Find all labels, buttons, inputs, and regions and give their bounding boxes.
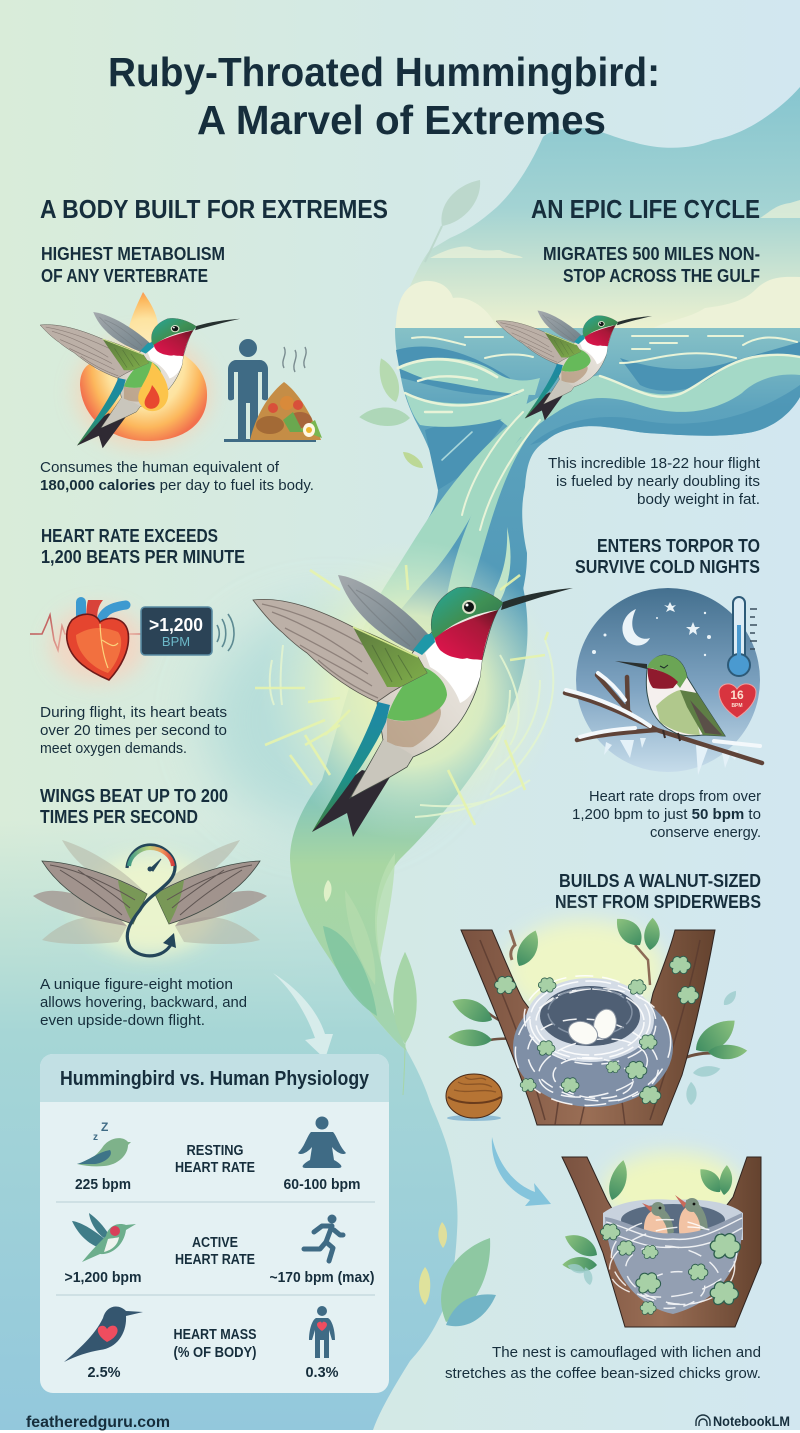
nest heading: NEST FROM SPIDERWEBS <box>555 892 761 912</box>
icon: person with heart <box>309 1306 335 1358</box>
heart rate text: over 20 times per second to <box>40 722 227 739</box>
migration heading <box>543 244 760 286</box>
row: active heart rate: >1,200 bpm <box>64 1270 142 1286</box>
stream strands <box>350 410 540 680</box>
torpor text <box>572 788 761 841</box>
panel header <box>40 1054 389 1102</box>
panel: migration <box>496 244 761 508</box>
heart rate heart <box>719 684 756 718</box>
heart rate heart: BPM <box>731 703 743 709</box>
heart rate heading <box>41 526 245 567</box>
panel: hummingbird vs human physiology <box>40 1054 389 1393</box>
icon: food pile <box>250 347 322 440</box>
migration text: This incredible 18-22 hour flight <box>548 455 761 472</box>
metabolism text: Consumes the human equivalent of <box>40 459 280 476</box>
row: active heart rate: ACTIVE <box>192 1235 238 1251</box>
footer: notebooklm logo: NotebookLM <box>713 1414 790 1429</box>
panel: torpor <box>565 536 762 841</box>
heart rate text: meet oxygen demands. <box>40 740 187 757</box>
row: heart mass <box>64 1306 339 1381</box>
icon: meditating person <box>298 1116 346 1168</box>
migration text <box>548 455 761 508</box>
icon: nest with eggs <box>447 912 747 1125</box>
darker sea bands <box>396 342 800 490</box>
icon: figure-eight wings <box>33 840 267 956</box>
moon and stars <box>592 602 711 656</box>
branch with snow and ice <box>565 673 762 775</box>
wings heading <box>40 786 228 827</box>
metabolism heading: OF ANY VERTEBRATE <box>41 266 208 286</box>
migration heading: STOP ACROSS THE GULF <box>563 266 760 286</box>
metabolism text: 180,000 calories per day to fuel its body. <box>40 477 314 494</box>
row: active heart rate: HEART RATE <box>175 1252 255 1268</box>
icon: hummingbird over gulf <box>496 310 652 421</box>
row: active heart rate: ~170 bpm (max) <box>270 1270 375 1286</box>
scene: gulf sky and sea <box>350 87 800 680</box>
panel background <box>40 1054 389 1393</box>
clouds <box>396 200 800 328</box>
nest heading: BUILDS A WALNUT-SIZED <box>559 871 761 891</box>
icon: flying hummingbird <box>72 1213 136 1262</box>
wings text: A unique figure-eight motion <box>40 976 233 993</box>
metabolism text <box>40 459 314 494</box>
chest flame <box>138 362 168 411</box>
decorative swoosh: bottom-left blue wash <box>0 820 458 1430</box>
icon: ecg line <box>30 615 141 650</box>
icon: sleeping bird <box>615 655 725 741</box>
row: heart mass: (% OF BODY) <box>174 1345 257 1361</box>
sky <box>395 87 800 330</box>
heart rate text <box>40 704 227 757</box>
nest heading <box>555 871 761 912</box>
torpor text: conserve energy. <box>650 824 761 841</box>
migration heading: MIGRATES 500 MILES NON- <box>543 244 760 264</box>
icon: sleeping bird: Z <box>101 1120 108 1134</box>
sea <box>390 328 800 590</box>
torpor heading: ENTERS TORPOR TO <box>597 536 760 556</box>
heart rate heading: HEART RATE EXCEEDS <box>41 526 218 546</box>
title: A Marvel of Extremes <box>197 97 606 143</box>
chicks <box>642 1195 708 1240</box>
heading: a body built for extremes: A BODY BUILT FOR EXTREMES <box>40 194 388 224</box>
row: resting heart rate <box>75 1116 360 1193</box>
icon: sound waves <box>217 614 234 651</box>
row: resting heart rate: 225 bpm <box>75 1177 131 1193</box>
icon: bird silhouette with heart <box>64 1307 143 1362</box>
wings text <box>40 976 247 1029</box>
row: active heart rate <box>64 1213 375 1286</box>
row: resting heart rate: HEART RATE <box>175 1160 255 1176</box>
bpm monitor: >1,200 <box>149 615 203 635</box>
stem leaves <box>323 853 395 1016</box>
torpor heading <box>575 536 760 577</box>
night circle <box>576 588 760 772</box>
icon: sleeping bird: z <box>93 1132 98 1143</box>
nest text <box>445 1344 761 1382</box>
thermometer <box>728 597 757 676</box>
metabolism heading: HIGHEST METABOLISM <box>41 244 225 264</box>
flowing stem from the sea to the nest <box>290 580 528 1051</box>
panel: nest <box>445 871 761 1382</box>
migration text: body weight in fat. <box>637 491 760 508</box>
heart rate heart: 16 <box>730 688 744 702</box>
bpm monitor: BPM <box>162 634 190 649</box>
wings heading: WINGS BEAT UP TO 200 <box>40 786 228 806</box>
torpor text: Heart rate drops from over <box>589 788 761 805</box>
icon: walnut <box>446 1074 502 1121</box>
heading: an epic life cycle: AN EPIC LIFE CYCLE <box>531 194 760 224</box>
torpor text: 1,200 bpm to just 50 bpm to <box>572 806 761 823</box>
panel: heart rate <box>30 526 245 757</box>
icon: heart <box>50 600 146 683</box>
panel: wings <box>33 786 267 1029</box>
heart rate text: During flight, its heart beats <box>40 704 227 721</box>
row: resting heart rate: 60-100 bpm <box>284 1177 360 1193</box>
title: Ruby-Throated Hummingbird: <box>108 49 660 95</box>
arrow: nest to chicks <box>492 1137 551 1206</box>
icon: sleeping bird <box>77 1120 131 1166</box>
row: heart mass: 2.5% <box>88 1365 121 1381</box>
torpor heading: SURVIVE COLD NIGHTS <box>575 557 760 577</box>
panel: metabolism <box>40 244 322 494</box>
panel title: Hummingbird vs. Human Physiology <box>60 1068 370 1090</box>
icon: hummingbird over flames <box>40 312 240 448</box>
metabolism heading <box>41 244 225 286</box>
icon: person <box>224 339 316 442</box>
arrow to comparison table <box>273 973 333 1059</box>
row: heart mass: 0.3% <box>306 1365 339 1381</box>
nest text: stretches as the coffee bean-sized chicks grow. <box>445 1365 761 1382</box>
title <box>108 49 660 143</box>
wings heading: TIMES PER SECOND <box>40 807 198 827</box>
wings text: allows hovering, backward, and <box>40 994 247 1011</box>
wings text: even upside-down flight. <box>40 1012 205 1029</box>
migration text: is fueled by nearly doubling its <box>556 473 760 490</box>
icon: nest with chicks <box>562 1152 761 1327</box>
mint wave bands <box>398 355 800 440</box>
decorative leaves <box>359 180 496 1326</box>
heart rate heading: 1,200 BEATS PER MINUTE <box>41 547 245 567</box>
icon: central hummingbird <box>253 575 573 837</box>
central glow with radiating lines <box>255 540 560 840</box>
row: resting heart rate: RESTING <box>186 1143 244 1159</box>
decorative: teal haze around central bird <box>205 610 455 830</box>
bpm monitor <box>141 607 212 655</box>
icon: running person <box>304 1214 343 1261</box>
row: heart mass: HEART MASS <box>174 1327 257 1343</box>
icon: flames <box>75 292 211 448</box>
footer: source: featheredguru.com <box>26 1414 170 1431</box>
nest text: The nest is camouflaged with lichen and <box>492 1344 761 1361</box>
wave and stream highlights <box>398 336 800 530</box>
